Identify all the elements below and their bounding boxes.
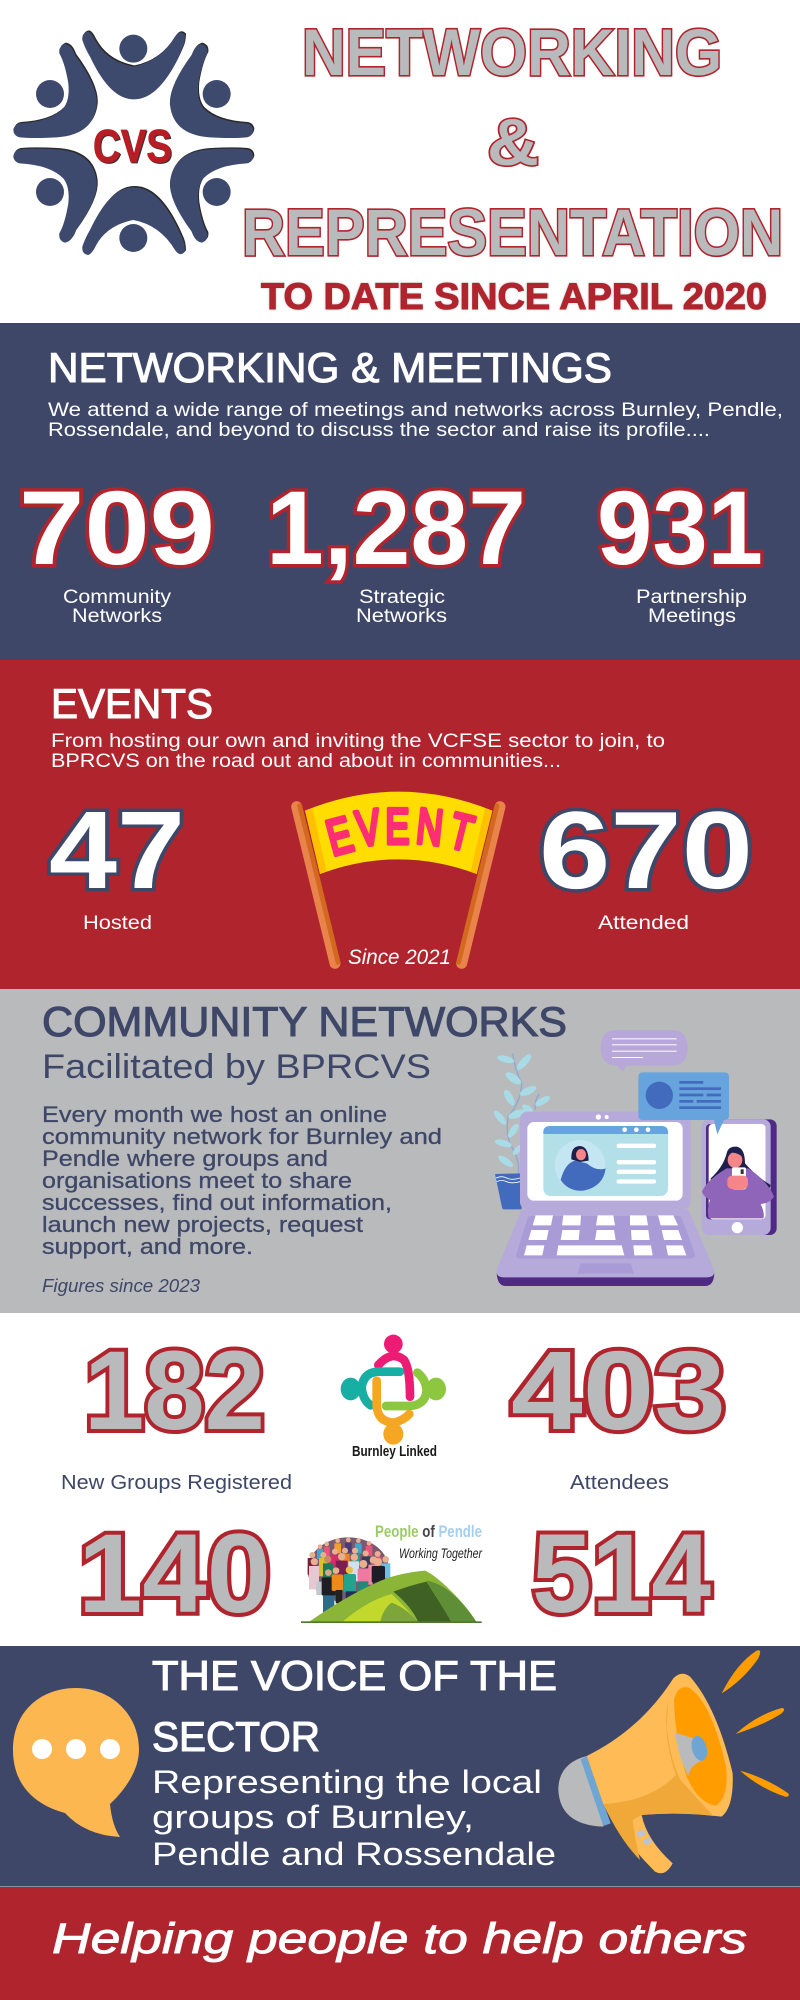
- panel: voice of the sector: [0, 1646, 800, 1887]
- strapline text: Helping people to help others: [52, 1915, 747, 1963]
- body text: community network for Burnley and: [42, 1124, 442, 1149]
- heading: SECTOR: [152, 1713, 320, 1760]
- caption: since 2021: Since 2021: [348, 946, 451, 969]
- icon: crowd: [308, 1537, 390, 1615]
- stat: new groups burnley: 182: [84, 1328, 265, 1453]
- icon: event banner: V: [353, 800, 384, 858]
- heading: THE VOICE OF THE: [152, 1652, 557, 1699]
- panel: networking and meetings: [0, 323, 800, 660]
- note: Figures since 2023: [42, 1276, 200, 1296]
- stat: hosted: Hosted: [83, 913, 152, 934]
- stat: hosted: 47: [49, 789, 185, 912]
- icon: megaphone: [558, 1650, 789, 1873]
- body text: groups of Burnley,: [152, 1799, 474, 1835]
- stat: partnership meetings: 931: [597, 470, 763, 587]
- icon: event banner: E: [321, 807, 359, 867]
- stat: attended: Attended: [598, 913, 689, 934]
- icon: speech bubble: [13, 1688, 139, 1837]
- body text: organisations meet to share: [42, 1168, 352, 1193]
- body text: [42, 1102, 442, 1259]
- stat: community networks: Networks: [72, 606, 162, 627]
- illustration: laptop and phone: [492, 1030, 777, 1286]
- heading: COMMUNITY NETWORKS: [42, 998, 567, 1045]
- icon: CVS logo: CVS: [93, 120, 172, 172]
- icon: event banner: N: [414, 799, 445, 857]
- intro text: Rossendale, and beyond to discuss the sector and raise its profile....: [48, 420, 710, 441]
- subtitle: TO DATE SINCE APRIL 2020: [261, 276, 767, 317]
- panel: events: [0, 660, 800, 989]
- stat: partnership meetings: Partnership: [636, 587, 747, 608]
- label: attendees: Attendees: [570, 1472, 669, 1494]
- intro text: [51, 731, 665, 772]
- intro text: BPRCVS on the road out and about in communities...: [51, 751, 561, 772]
- panel: header: [0, 0, 800, 323]
- icon: Burnley Linked logo: [341, 1335, 446, 1460]
- intro text: We attend a wide range of meetings and networks across Burnley, Pendle,: [48, 400, 783, 421]
- title: &: [487, 105, 539, 179]
- stat: attendees pendle: 514: [532, 1511, 711, 1636]
- title: [242, 15, 783, 269]
- body text: Representing the local: [152, 1764, 542, 1800]
- icon: event banner: [297, 792, 500, 963]
- icon: lavender speech bubble: [601, 1030, 688, 1072]
- stat: strategic networks: Networks: [356, 606, 447, 627]
- stat: new groups pendle: 140: [78, 1511, 271, 1636]
- title: NETWORKING: [302, 15, 722, 89]
- icon: laptop: [497, 1112, 714, 1286]
- icon: plant: [492, 1052, 552, 1209]
- stat: strategic networks: Strategic: [359, 587, 445, 608]
- icon: phone: [702, 1119, 777, 1235]
- body text: Every month we host an online: [42, 1102, 387, 1127]
- intro text: [48, 400, 783, 441]
- panel: footer strapline: [0, 1886, 800, 2000]
- body text: launch new projects, request: [42, 1212, 364, 1237]
- icon: People of Pendle logo: Working Together: [399, 1546, 482, 1561]
- icon: Burnley Linked logo: Burnley Linked: [352, 1443, 437, 1460]
- stat: strategic networks: 1,287: [266, 470, 526, 587]
- heading: EVENTS: [51, 680, 213, 727]
- icon: hill: [301, 1571, 482, 1623]
- body text: [152, 1764, 556, 1872]
- body text: Pendle where groups and: [42, 1146, 328, 1171]
- intro text: From hosting our own and inviting the VCFSE sector to join, to: [51, 731, 665, 752]
- icon: People of Pendle logo: People of Pendle: [375, 1522, 482, 1541]
- stat: attended: 670: [539, 789, 753, 912]
- icon: event banner: E: [385, 800, 409, 855]
- heading: [152, 1652, 557, 1760]
- panel: burnley and pendle figures: [0, 1313, 800, 1646]
- subheading: Facilitated by BPRCVS: [42, 1048, 431, 1086]
- icon: People of Pendle logo: [301, 1522, 482, 1623]
- label: new groups registered: New Groups Registered: [61, 1472, 292, 1494]
- stat: community networks: [19, 470, 215, 627]
- heading: NETWORKING & MEETINGS: [48, 344, 612, 391]
- icon: CVS logo: [13, 30, 254, 255]
- body text: Pendle and Rossendale: [152, 1836, 556, 1872]
- panel: community networks: [0, 989, 800, 1313]
- stat: partnership meetings: Meetings: [648, 606, 736, 627]
- body text: support, and more.: [42, 1234, 253, 1259]
- stat: community networks: 709: [19, 470, 215, 587]
- stat: community networks: Community: [63, 587, 172, 608]
- body text: successes, find out information,: [42, 1190, 392, 1215]
- icon: event banner: T: [444, 804, 479, 862]
- icon: blue message bubble: [638, 1072, 729, 1134]
- stat: attendees burnley: 403: [511, 1328, 726, 1453]
